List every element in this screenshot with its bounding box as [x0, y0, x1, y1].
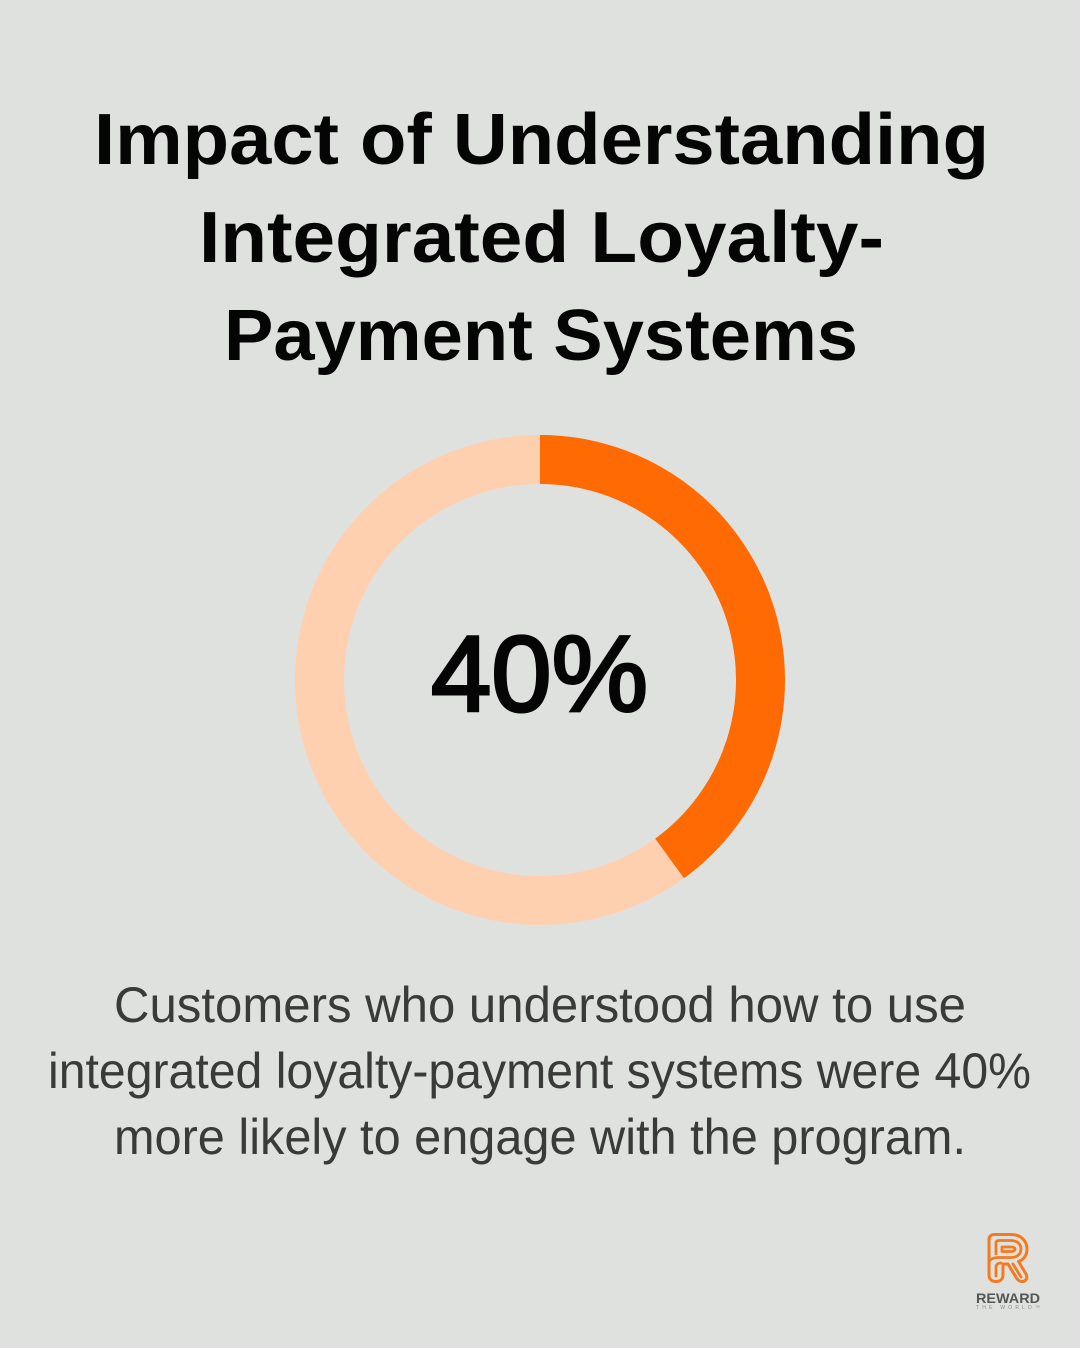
description text: integrated loyalty-payment systems were 40%: [48, 1043, 1031, 1099]
description text: more likely to engage with the program.: [114, 1109, 966, 1165]
title: Impact of Understanding: [94, 100, 989, 180]
icon: R mark: [989, 1234, 1027, 1282]
donut value label: 40%: [431, 613, 648, 734]
description text: [48, 977, 1031, 1165]
donut value arc: [540, 460, 761, 858]
description text: Customers who understood how to use: [114, 977, 966, 1033]
logo tagline: THE WORLD™: [976, 1305, 1040, 1311]
brand logo: [976, 1234, 1040, 1311]
title: Integrated Loyalty-: [199, 198, 884, 278]
title: Payment Systems: [224, 296, 858, 376]
donut chart: 40%: [320, 460, 761, 900]
logo wordmark: REWARD: [976, 1290, 1040, 1306]
donut track: [320, 460, 760, 900]
title: [94, 100, 989, 376]
